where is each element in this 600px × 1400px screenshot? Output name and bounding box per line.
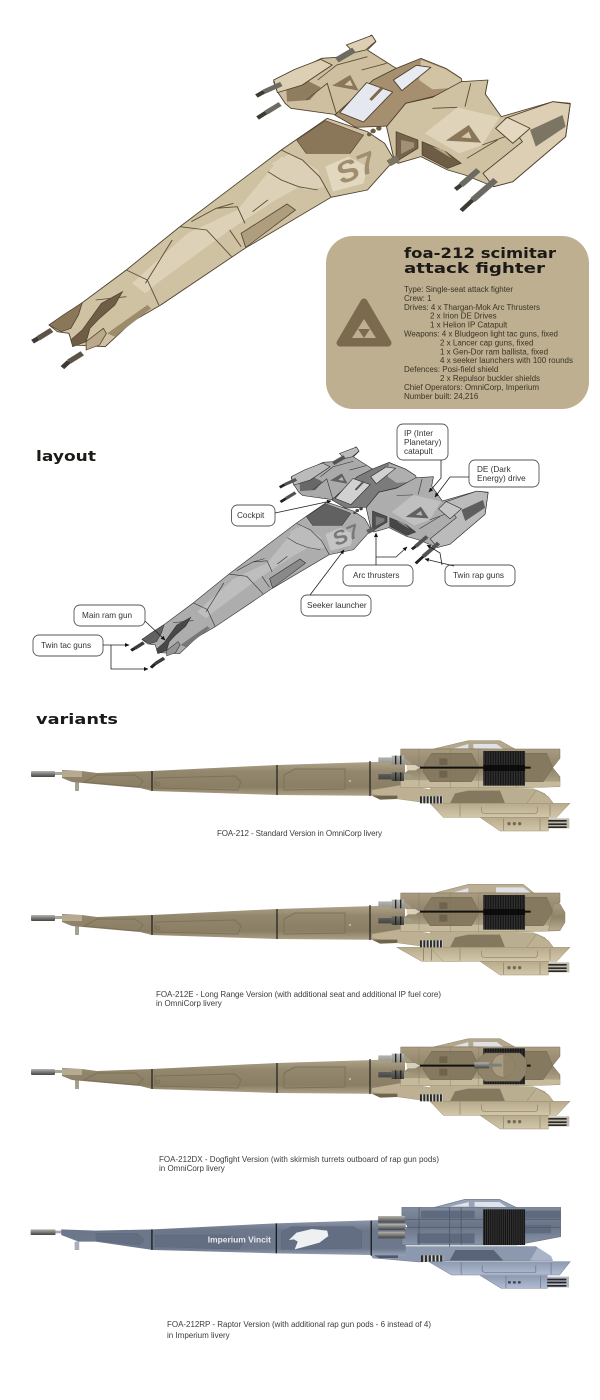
specification text: Crew: 1 [404, 294, 432, 303]
card title: attack fighter [404, 261, 545, 277]
callout: seeker launcher: Seeker launcher [307, 601, 367, 610]
caption: FOA-212 - Standard Version in OmniCorp livery [217, 829, 382, 838]
variant: FOA-212E long range [31, 884, 570, 1008]
fuel grid [483, 1209, 525, 1245]
turret [474, 1048, 527, 1084]
lower wing [429, 1262, 570, 1275]
caption [159, 1155, 439, 1173]
raptor ship [31, 1199, 570, 1288]
specification text: 4 x seeker launchers with 100 rounds [440, 356, 573, 365]
callout: main ram gun [74, 605, 165, 640]
caption [156, 990, 441, 1008]
variant: FOA-212 standard [31, 741, 570, 838]
callout: IP catapult: Planetary) [404, 438, 442, 447]
fuel grid [483, 751, 525, 786]
specification text: Weapons: 4 x Bludgeon light tac guns, fixed [404, 330, 558, 338]
caption: in OmniCorp livery [159, 1164, 225, 1173]
fuel grid [483, 895, 525, 930]
variant: FOA-212DX dogfight [31, 1039, 570, 1173]
callout: DE drive: Energy) drive [477, 474, 526, 483]
lower body [371, 1247, 552, 1262]
spec card [326, 236, 589, 409]
callout: seeker launcher [301, 550, 371, 616]
fuselage panels [96, 1227, 362, 1249]
canopy [433, 741, 515, 749]
specification text: 2 x Lancer cap guns, fixed [440, 338, 533, 347]
caption: in OmniCorp livery [156, 999, 222, 1008]
callout: twin tac guns [33, 635, 148, 669]
callout: cockpit [232, 501, 331, 526]
fuselage [61, 1219, 406, 1256]
callout: arc thrusters: Arc thrusters [353, 571, 399, 580]
specification text: 2 x Irion DE Drives [430, 312, 497, 321]
specification text: 1 x Gen-Dor ram ballista, fixed [440, 347, 548, 356]
specification text: Type: Single-seat attack fighter [404, 285, 513, 294]
specification text: 2 x Repulsor buckler shields [440, 374, 540, 383]
heading: layout: layout [36, 449, 96, 465]
callout: main ram gun: Main ram gun [82, 611, 133, 620]
specification text: 1 x Helion IP Catapult [430, 321, 508, 330]
card title [404, 246, 556, 277]
layout diagram: greyscale ship [131, 447, 488, 668]
specification text: Number built: 24,216 [404, 392, 479, 401]
gun barrel [31, 1229, 79, 1250]
canopy [433, 1039, 515, 1047]
gun pod [480, 1276, 547, 1288]
caption: in Imperium livery [167, 1331, 230, 1340]
rap gun pods [378, 1216, 405, 1238]
callout: IP catapult: catapult [404, 447, 433, 456]
callout: DE drive: DE (Dark [477, 465, 512, 474]
caption [167, 1320, 431, 1340]
caption: FOA-212RP - Raptor Version (with additional rap gun pods - 6 instead of 4) [167, 1320, 431, 1329]
lengthened lower wing [397, 947, 460, 961]
tail dome [530, 1247, 553, 1261]
specification text [404, 285, 573, 401]
Imperium Vincit marking: Imperium Vincit [208, 1235, 271, 1245]
extended canopy [435, 884, 534, 893]
icon: triangle emblem [340, 302, 388, 343]
heading: variants: variants [36, 712, 118, 728]
main engine block [402, 1207, 561, 1245]
specification text: Chief Operators: OmniCorp, Imperium [404, 383, 539, 392]
icon: eagle head [289, 1229, 328, 1249]
callout: IP catapult [397, 424, 448, 492]
variant: FOA-212RP raptor in Imperium livery [31, 1199, 570, 1340]
specification text: Drives: 4 x Thargan-Mok Arc Thrusters [404, 303, 540, 312]
callout: cockpit: Cockpit [237, 511, 265, 520]
callout: twin rap guns: Twin rap guns [453, 571, 504, 580]
hero illustration: FOA-212 scimitar isometric [33, 35, 570, 368]
rounded aft section [548, 904, 565, 931]
canopy [432, 1199, 517, 1208]
caption: FOA-212E - Long Range Version (with additional seat and additional IP fuel core) [156, 990, 441, 999]
callout: twin tac guns: Twin tac guns [41, 641, 91, 650]
callout: IP catapult: IP (Inter [404, 429, 433, 438]
callout: arc thrusters [343, 533, 413, 586]
callout: twin rap guns [425, 545, 515, 586]
specification text: Defences: Posi-field shield [404, 365, 498, 374]
callout: DE drive [435, 460, 539, 497]
caption: FOA-212DX - Dogfight Version (with skirmish turrets outboard of rap gun pods) [159, 1155, 439, 1164]
card title: foa-212 scimitar [404, 246, 556, 262]
